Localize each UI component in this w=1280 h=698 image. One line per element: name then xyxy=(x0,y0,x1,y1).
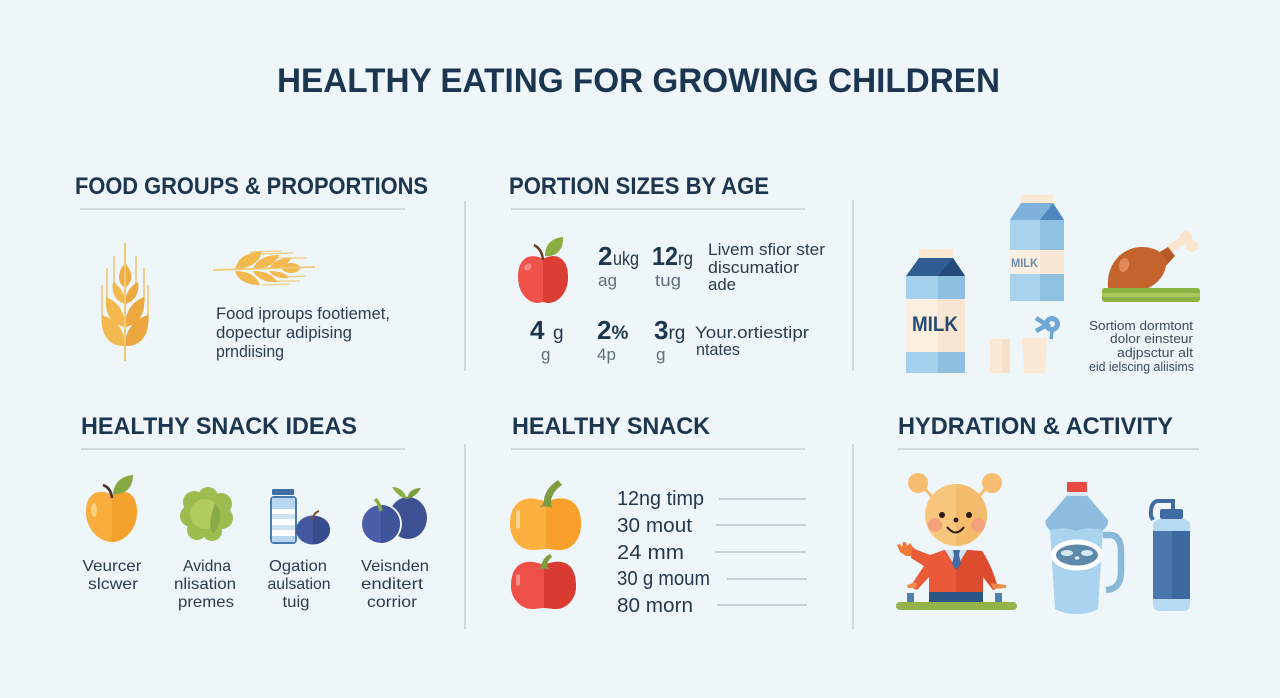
text block: food groups note: prndiising xyxy=(216,342,284,361)
text block: snack label two: nlisation xyxy=(174,576,236,593)
list: snack timing: 24 mm xyxy=(617,542,684,564)
icon: water jug with handle xyxy=(1046,482,1121,614)
icon: upright wheat xyxy=(102,243,148,361)
panel: portion sizes by age xyxy=(509,173,825,364)
text block: snack label two xyxy=(174,558,236,611)
stats: second row: g xyxy=(541,345,550,364)
panel: healthy snack ideas xyxy=(81,413,429,611)
text block: snack label three: aulsation xyxy=(268,576,330,593)
list: snack timing: 12ng timp xyxy=(617,488,704,510)
text block: portion note one: Livem sfior ster xyxy=(708,240,825,259)
stats: first row: 2 xyxy=(598,241,612,271)
panel: food groups and proportions xyxy=(75,173,428,361)
text block: food groups note xyxy=(216,304,390,361)
text block: snack label four xyxy=(361,558,429,611)
icon: small milk carton xyxy=(1010,195,1064,301)
text block: dairy note: dolor einsteur xyxy=(1110,331,1194,346)
text block: snack label one xyxy=(82,558,142,593)
panel: healthy snack portions xyxy=(510,413,807,617)
icon: small milk carton: MILK xyxy=(1011,256,1038,270)
stats: first row: ag xyxy=(598,271,617,290)
icon: waving bear child xyxy=(896,473,1017,610)
panel: dairy and protein xyxy=(906,195,1200,374)
icon: roast chicken xyxy=(1102,231,1200,302)
text block: snack label three: Ogation xyxy=(269,558,327,575)
stats: second row: 2% xyxy=(597,315,628,345)
text block: snack label one: Veurcer xyxy=(82,558,142,575)
text block: snack label three xyxy=(268,558,330,611)
stats: first row: 12 xyxy=(652,241,678,271)
icon: red pepper xyxy=(511,554,576,609)
icon: blue clip xyxy=(1036,318,1058,339)
stats: first row: rg xyxy=(678,249,693,270)
text block: dairy note: eid ielscing aliisims xyxy=(1089,359,1194,374)
icon: large milk carton: MILK xyxy=(912,313,958,336)
heading: healthy snack: HEALTHY SNACK xyxy=(512,413,711,440)
icon: large milk carton xyxy=(906,249,965,373)
stats: second row: 4p xyxy=(597,345,616,364)
text block: food groups note: dopectur adipising xyxy=(216,323,352,342)
text block: snack label four: Veisnden xyxy=(361,558,429,575)
stats: second row: 4 xyxy=(530,315,545,345)
heading: food groups: FOOD GROUPS & PROPORTIONS xyxy=(75,173,428,200)
text block: snack label four: enditert xyxy=(361,576,424,593)
icon: bottle and plum xyxy=(271,489,330,544)
text block: dairy note xyxy=(1089,318,1194,374)
list: snack timing: 30 g moum xyxy=(617,568,710,590)
text block: snack label four: corrior xyxy=(367,594,418,611)
icon: blue sports bottle xyxy=(1151,501,1190,611)
stats: second row: g xyxy=(656,345,665,364)
icon: orange fruit xyxy=(86,475,137,542)
heading: portion sizes: PORTION SIZES BY AGE xyxy=(509,173,769,200)
text block: dairy note: Sortiom dormtont xyxy=(1089,318,1193,333)
text block: snack label one: slcwer xyxy=(88,576,139,593)
text block: snack label two: premes xyxy=(178,594,234,611)
text block: portion note two xyxy=(695,323,809,359)
icon: green broccoli xyxy=(180,487,233,541)
stats: second row: g xyxy=(553,323,564,344)
text block: dairy note: adjpsctur alt xyxy=(1117,345,1193,360)
icon: orange pepper xyxy=(510,480,581,550)
list: snack timing: 30 mout xyxy=(617,515,692,537)
text block: portion note two: Your.ortiestipr xyxy=(695,323,809,342)
heading: snack ideas: HEALTHY SNACK IDEAS xyxy=(81,413,357,440)
stats: first row xyxy=(598,241,693,290)
text block: portion note one: discumatior xyxy=(708,258,799,277)
title: HEALTHY EATING FOR GROWING CHILDREN xyxy=(277,62,1000,100)
icon: blue plums xyxy=(360,487,427,545)
stats: second row: 3rg xyxy=(654,315,685,345)
text block: portion note one: ade xyxy=(708,275,736,294)
text block: portion note one xyxy=(708,240,825,294)
text block: snack label two: Avidna xyxy=(183,558,231,575)
panel: hydration and activity xyxy=(896,413,1199,614)
icon: red apple xyxy=(518,237,568,303)
heading: hydration: HYDRATION & ACTIVITY xyxy=(898,413,1173,440)
text block: food groups note: Food iproups footiemet, xyxy=(216,304,390,323)
icon: horizontal wheat xyxy=(213,251,315,285)
list: snack timing xyxy=(617,488,807,617)
text block: portion note two: ntates xyxy=(696,340,740,359)
text block: snack label three: tuig xyxy=(282,594,310,611)
stats: first row: tug xyxy=(655,271,681,290)
stats: second row xyxy=(530,315,685,364)
stats: first row: ukg xyxy=(613,249,639,270)
list: snack timing: 80 morn xyxy=(617,595,693,617)
icon: cream cups xyxy=(990,338,1047,373)
